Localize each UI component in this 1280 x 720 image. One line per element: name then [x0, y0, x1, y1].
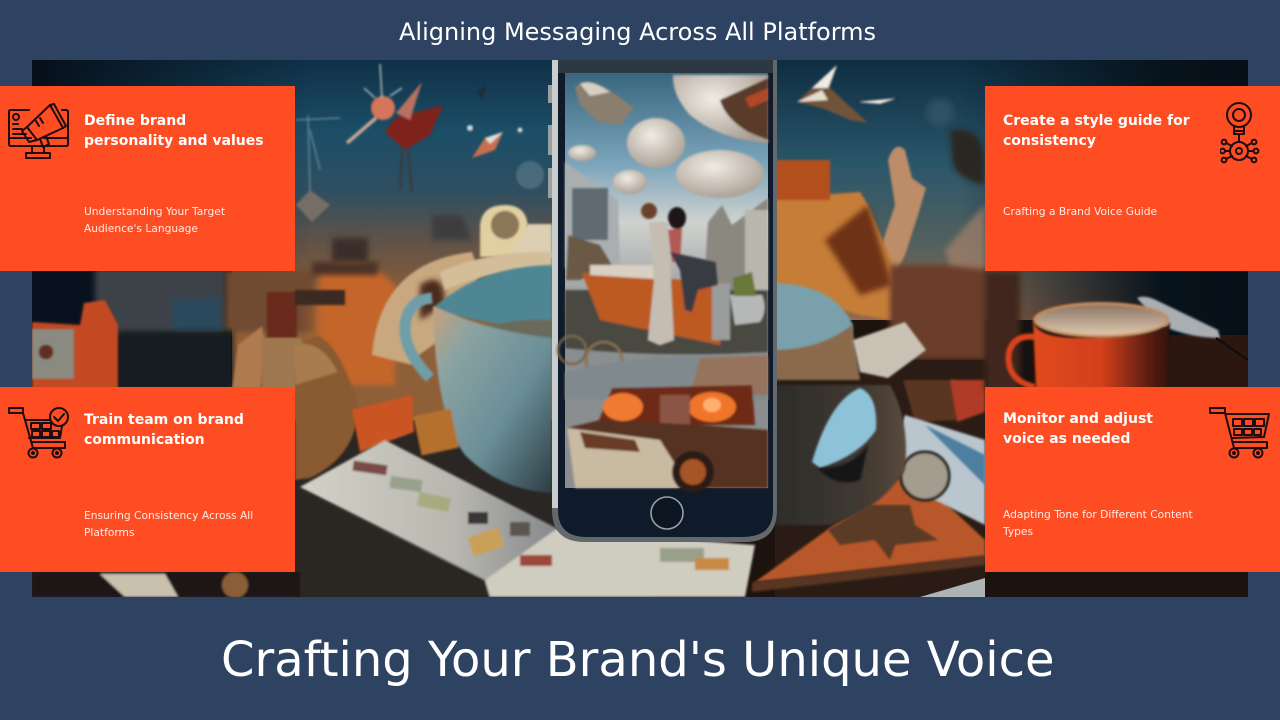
- home button: [651, 497, 683, 529]
- supporting text: Ensuring Consistency Across All: [84, 509, 253, 522]
- car: [597, 385, 755, 425]
- buildings: [565, 162, 620, 268]
- supporting text: [84, 509, 253, 539]
- supporting text: Platforms: [84, 526, 134, 539]
- supporting text: [1002, 508, 1193, 538]
- open book: [32, 440, 755, 598]
- right clutter objects: [752, 129, 988, 600]
- top heading: Aligning Messaging Across All Platforms: [399, 18, 876, 46]
- icon: monitor with megaphone: [8, 103, 69, 159]
- heading: voice as needed: [1003, 431, 1130, 447]
- supporting text: Crafting a Brand Voice Guide: [1003, 205, 1157, 218]
- large blue cup: [405, 265, 552, 493]
- heading: Define brand: [84, 113, 186, 129]
- backdrop: [32, 60, 1248, 597]
- supporting text: Audience's Language: [84, 222, 198, 235]
- couple: [648, 222, 674, 345]
- heading: [1003, 113, 1190, 149]
- background illustration: desk scene with smartphone: [32, 60, 1248, 597]
- heading: personality and values: [84, 133, 264, 149]
- heading: communication: [84, 432, 205, 448]
- red coffee cup and spoon: [985, 271, 1248, 395]
- small flying creatures: [296, 64, 954, 222]
- heading: consistency: [1003, 133, 1096, 149]
- icon: shopping cart: [1209, 407, 1270, 458]
- icon: shopping cart with check: [8, 407, 69, 458]
- main title: Crafting Your Brand's Unique Voice: [221, 632, 1054, 688]
- heading: [84, 412, 244, 448]
- supporting text: Adapting Tone for Different Content: [1003, 508, 1193, 521]
- heading: [1003, 411, 1153, 447]
- panel: create a style guide: [985, 86, 1280, 271]
- supporting text: Types: [1003, 525, 1033, 538]
- smartphone: [548, 60, 777, 542]
- heading: Monitor and adjust: [1003, 411, 1153, 427]
- supporting text: Understanding Your Target: [84, 205, 225, 218]
- heading: [84, 113, 264, 149]
- left clutter objects: [32, 205, 552, 480]
- clouds: [568, 75, 768, 198]
- supporting text: [84, 205, 225, 235]
- icon: lightbulb with gear and nodes: [1220, 102, 1260, 164]
- panel: define brand personality: [0, 86, 295, 271]
- panel: monitor and adjust: [985, 387, 1280, 572]
- heading: Create a style guide for: [1003, 113, 1190, 129]
- heading: Train team on brand: [84, 412, 244, 428]
- street: [565, 290, 768, 354]
- panel: train team: [0, 387, 295, 572]
- phone screen: [565, 73, 768, 488]
